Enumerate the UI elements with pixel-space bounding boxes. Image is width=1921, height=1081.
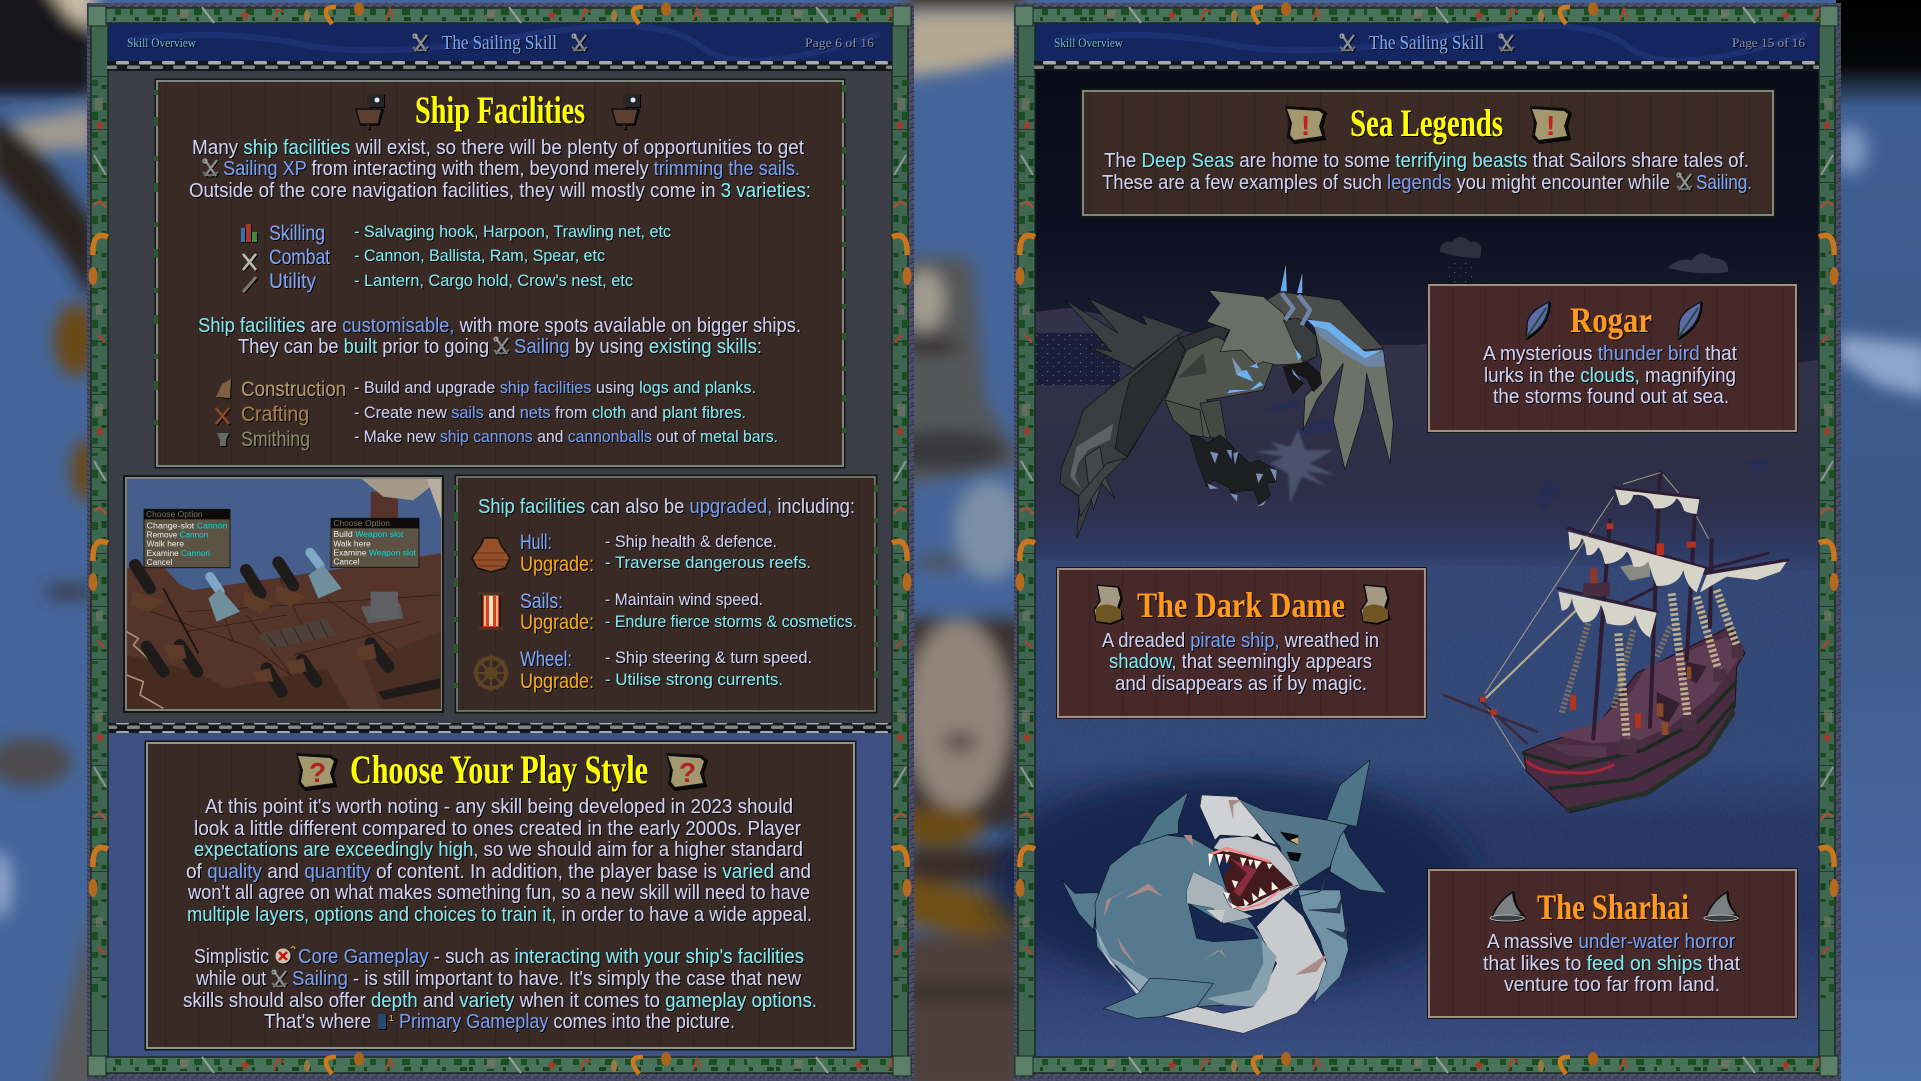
icon: sail bbox=[479, 592, 503, 630]
icon: exclamation scroll bbox=[1285, 106, 1326, 143]
upgrades list: Upgrade: bbox=[520, 553, 594, 576]
play style paragraph: of quality and quantity of content. In addition, the player base is varied and bbox=[186, 861, 811, 883]
building skills list: - Create new sails and nets from cloth and plant fibres. bbox=[354, 403, 746, 422]
play style paragraph: look a little different compared to ones created in the early 2000s. Player bbox=[194, 818, 801, 840]
icon: sack bbox=[1361, 585, 1389, 623]
intro text: Outside of the core navigation facilities, they will mostly come in 3 varieties: bbox=[189, 180, 811, 202]
title text: Choose Your Play Style bbox=[350, 747, 648, 792]
icon: question scroll bbox=[296, 753, 337, 790]
left page: background and header bbox=[107, 23, 892, 1061]
upgrades list: - Endure fierce storms & cosmetics. bbox=[605, 612, 857, 631]
right page header text: Page 15 of 16 bbox=[1732, 35, 1805, 50]
icon: wheel bbox=[473, 655, 509, 691]
illustration: dark dame pirate ship bbox=[1443, 472, 1788, 813]
panel: the sharhai bbox=[1428, 869, 1797, 1018]
facility varieties list: - Salvaging hook, Harpoon, Trawling net, etc bbox=[354, 222, 671, 241]
play style paragraph: won't all agree on what makes something fun, so a new skill will need to have bbox=[187, 882, 810, 904]
customisable text: Ship facilities are customisable, with more spots available on bigger ships. bbox=[198, 315, 801, 337]
building skills list: - Make new ship cannons and cannonballs out of metal bars. bbox=[354, 427, 778, 446]
heading: the sharhai bbox=[1490, 887, 1738, 927]
customisable text: Sailing by using existing skills: bbox=[514, 336, 762, 358]
heading: rogar bbox=[1526, 300, 1701, 340]
upgrades list: - Maintain wind speed. bbox=[605, 590, 763, 609]
icon: flag bbox=[356, 93, 384, 129]
right page header text bbox=[1054, 32, 1805, 54]
right-click menu: weapon slot: Examine Weapon slot bbox=[333, 549, 417, 558]
right-click menu: cannon bbox=[144, 509, 230, 568]
upgrades list: Upgrade: bbox=[520, 670, 594, 693]
left page header text: Page 6 of 16 bbox=[805, 35, 875, 50]
customisable text bbox=[198, 315, 801, 358]
title text: Ship Facilities bbox=[415, 89, 585, 132]
dark dame text: and disappears as if by magic. bbox=[1115, 673, 1367, 695]
title text: The Sharhai bbox=[1537, 887, 1689, 927]
sea legends text bbox=[1102, 150, 1752, 194]
icon: skilling bars bbox=[241, 224, 257, 242]
icon: hull bbox=[472, 538, 510, 572]
right-click menu: cannon: Change-slot Cannon bbox=[147, 521, 228, 530]
icon: fin bbox=[1490, 892, 1524, 921]
upgrades list: Wheel: bbox=[520, 648, 572, 671]
icon: primary gameplay: 1 bbox=[389, 1014, 394, 1023]
intro text: Many ship facilities will exist, so there will be plenty of opportunities to get bbox=[192, 137, 804, 159]
play style paragraph: multiple layers, options and choices to train it, in order to have a wide appeal. bbox=[187, 904, 812, 926]
play style paragraph: At this point it's worth noting - any skill being developed in 2023 should bbox=[205, 796, 793, 818]
panel: upgrades bbox=[456, 476, 876, 712]
building skills list: Crafting bbox=[241, 403, 309, 426]
right-click menu: cannon: Walk here bbox=[147, 540, 185, 549]
left page frame bbox=[0, 2, 1083, 1081]
right-click menu: weapon slot: Choose Option bbox=[333, 519, 390, 528]
right-click menu: cannon: Choose Option bbox=[146, 510, 203, 519]
facility varieties list: Skilling bbox=[269, 222, 325, 245]
gameplay paragraph: Sailing - is still important to have. It's simply the case that new bbox=[292, 968, 802, 990]
heading: choose your play style bbox=[296, 747, 707, 792]
icon: primary gameplay bbox=[378, 1014, 394, 1029]
left page header text: Skill Overview bbox=[127, 35, 197, 50]
icon: question scroll: ? bbox=[679, 757, 696, 788]
right page: night sky and sea background bbox=[990, 23, 1819, 1063]
sharhai text: that likes to feed on ships that bbox=[1483, 953, 1740, 975]
icon: feather bbox=[1678, 302, 1701, 338]
left page header text: The Sailing Skill bbox=[442, 32, 557, 54]
upgrades list: - Utilise strong currents. bbox=[605, 670, 783, 689]
sharhai text: A massive under-water horror bbox=[1487, 931, 1735, 953]
gameplay paragraph: Simplistic bbox=[194, 946, 269, 968]
heading: the dark dame bbox=[1094, 585, 1389, 625]
upgrades list: Hull: bbox=[520, 531, 552, 554]
sharhai text bbox=[1483, 931, 1740, 996]
gameplay paragraph bbox=[183, 946, 817, 1033]
rogar text: lurks in the clouds, magnifying bbox=[1484, 365, 1736, 387]
gameplay paragraph: Core Gameplay - such as interacting with your ship's facilities bbox=[298, 946, 804, 968]
heading: sea legends bbox=[1285, 102, 1571, 145]
right-click menu: cannon: Remove Cannon bbox=[147, 531, 208, 540]
right-click menu: weapon slot bbox=[331, 518, 419, 567]
right-click menu: weapon slot: Cancel bbox=[333, 558, 360, 567]
facility varieties list: Utility bbox=[269, 270, 316, 293]
heading: ship facilities bbox=[356, 89, 640, 132]
illustration: sharhai shark bbox=[1062, 760, 1387, 1033]
title text: Rogar bbox=[1570, 300, 1652, 340]
sea legends text: Sailing. bbox=[1696, 172, 1752, 194]
gameplay paragraph: That's where bbox=[264, 1011, 371, 1033]
building skills list: Smithing bbox=[241, 428, 310, 451]
intro text bbox=[189, 137, 811, 202]
rogar text: the storms found out at sea. bbox=[1493, 386, 1729, 408]
facility varieties list: - Lantern, Cargo hold, Crow's nest, etc bbox=[354, 271, 633, 290]
upgrades heading text: Ship facilities can also be upgraded, including: bbox=[478, 496, 855, 518]
icon: question scroll bbox=[666, 753, 707, 790]
icon: core gameplay bbox=[276, 947, 295, 964]
building skills list: - Build and upgrade ship facilities using logs and planks. bbox=[354, 378, 756, 397]
panel: ship facilities bbox=[156, 80, 844, 467]
upgrades list: - Ship steering & turn speed. bbox=[605, 648, 812, 667]
building skills list: Construction bbox=[241, 378, 346, 401]
right-click menu: cannon: Examine Cannon bbox=[147, 549, 210, 558]
sea legends text: These are a few examples of such legends you might encounter while bbox=[1102, 172, 1670, 194]
panel: ship deck screenshot bbox=[120, 475, 450, 715]
icon: flag bbox=[612, 93, 640, 129]
upgrades list: Upgrade: bbox=[520, 611, 594, 634]
panel: choose your play style bbox=[146, 742, 855, 1049]
title text: The Dark Dame bbox=[1137, 585, 1345, 625]
right page header text: Skill Overview bbox=[1054, 35, 1124, 50]
dark dame text: A dreaded pirate ship, wreathed in bbox=[1102, 630, 1379, 652]
gameplay paragraph: while out bbox=[195, 968, 266, 990]
right-click menu: weapon slot: Walk here bbox=[333, 539, 371, 548]
facility varieties list: Combat bbox=[269, 246, 330, 269]
gameplay paragraph: skills should also offer depth and variety when it comes to gameplay options. bbox=[183, 990, 817, 1012]
icon: crafting bbox=[216, 408, 229, 424]
icon: construction bbox=[216, 379, 231, 398]
panel: sea legends bbox=[1082, 90, 1774, 216]
intro text: Sailing XP from interacting with them, beyond merely trimming the sails. bbox=[223, 158, 800, 180]
sharhai text: venture too far from land. bbox=[1504, 974, 1720, 996]
icon: wrench bbox=[243, 277, 256, 292]
illustration: thunder bird bbox=[1060, 262, 1393, 538]
icon: smithing bbox=[217, 433, 229, 446]
title text: Sea Legends bbox=[1350, 102, 1503, 145]
upgrades list: Sails: bbox=[520, 590, 563, 613]
icon: fin bbox=[1704, 892, 1738, 921]
play style paragraph: expectations are exceedingly high, so we should aim for a higher standard bbox=[194, 839, 803, 861]
rogar text: A mysterious thunder bird that bbox=[1483, 343, 1737, 365]
upgrades list bbox=[520, 531, 857, 693]
icon: crossed swords bbox=[243, 254, 256, 270]
right page frame bbox=[782, 2, 1921, 1081]
right-click menu: weapon slot: Build Weapon slot bbox=[333, 530, 404, 539]
dark dame text: shadow, that seemingly appears bbox=[1109, 651, 1372, 673]
panel: the dark dame bbox=[1057, 568, 1426, 718]
sea legends text: The Deep Seas are home to some terrifying beasts that Sailors share tales of. bbox=[1104, 150, 1749, 172]
icon: exclamation scroll: ! bbox=[1546, 110, 1555, 141]
icon: exclamation scroll: ! bbox=[1301, 110, 1310, 141]
upgrades list: - Ship health & defence. bbox=[605, 532, 777, 551]
rogar text bbox=[1483, 343, 1737, 408]
icon: question scroll: ? bbox=[309, 757, 326, 788]
icon: feather bbox=[1526, 302, 1549, 338]
right-click menu: cannon: Cancel bbox=[147, 558, 173, 567]
upgrades list: - Traverse dangerous reefs. bbox=[605, 553, 811, 572]
left page header text bbox=[127, 32, 875, 54]
icon: exclamation scroll bbox=[1530, 106, 1571, 143]
gameplay paragraph: Primary Gameplay comes into the picture. bbox=[399, 1011, 735, 1033]
dark dame text bbox=[1102, 630, 1379, 695]
play style paragraph bbox=[186, 796, 812, 926]
building skills list bbox=[216, 378, 778, 451]
facility varieties list bbox=[241, 222, 671, 293]
customisable text: They can be built prior to going bbox=[238, 336, 489, 358]
right page header text: The Sailing Skill bbox=[1369, 32, 1484, 54]
panel: rogar bbox=[1428, 284, 1797, 432]
facility varieties list: - Cannon, Ballista, Ram, Spear, etc bbox=[354, 246, 605, 265]
icon: sack bbox=[1094, 585, 1122, 623]
